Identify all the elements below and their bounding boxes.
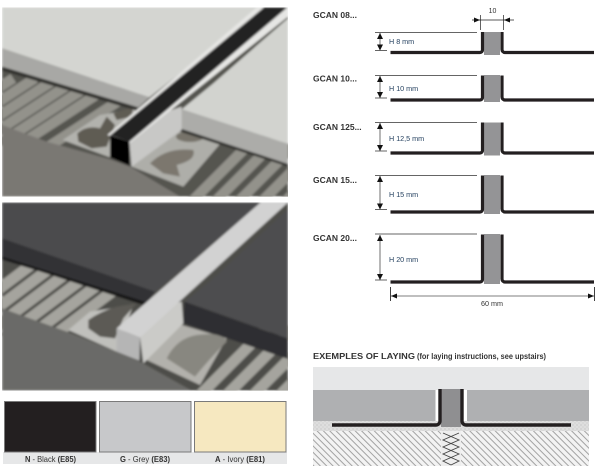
height dimension: H 15 mm (375, 176, 477, 210)
height dimension: H 12,5 mm: H 12,5 mm (389, 134, 424, 143)
label: grey: G - Grey (E83) (120, 455, 170, 464)
top surface (313, 367, 589, 390)
section: profile (390, 234, 594, 284)
joint gap and spring (441, 431, 461, 466)
laying cross-section diagram (313, 367, 589, 466)
swatch: ivory (194, 402, 286, 452)
photo: black profile between light tiles (2, 7, 288, 197)
heading: examples of laying (313, 351, 546, 361)
section: profile (390, 32, 594, 55)
width dimension: 10 (472, 8, 514, 30)
right tile (467, 390, 589, 421)
width dimension: 60 mm (390, 287, 594, 308)
heading: examples of laying: EXEMPLES OF LAYING (313, 351, 415, 361)
height dimension: H 10 mm: H 10 mm (389, 84, 418, 93)
profile: GCAN 20 (313, 233, 594, 284)
label: ivory: A - Ivory (E81) (215, 455, 265, 464)
height dimension: H 15 mm: H 15 mm (389, 190, 418, 199)
swatch: black (4, 402, 96, 452)
width dimension: 60 mm: 60 mm (481, 299, 503, 308)
band behind swatch labels (3, 452, 287, 464)
section: profile (390, 75, 594, 102)
height dimension: H 10 mm (375, 76, 477, 98)
heading: GCAN 125: GCAN 125... (313, 122, 362, 132)
profile section (332, 389, 571, 425)
heading: examples of laying: (for laying instructions, see upstairs) (417, 352, 546, 361)
height dimension: H 20 mm: H 20 mm (389, 255, 418, 264)
left tile (313, 390, 436, 421)
height dimension: H 12,5 mm (375, 122, 477, 151)
adhesive layer (313, 421, 589, 431)
profile: GCAN 15 (313, 175, 594, 214)
colour swatches (3, 402, 287, 464)
label: black: N - Black (E85) (25, 455, 76, 464)
profile: GCAN 125 (313, 122, 594, 156)
heading: GCAN 20: GCAN 20... (313, 233, 357, 243)
profile: GCAN 08 (313, 8, 594, 55)
joint filler (441, 389, 461, 427)
heading: GCAN 15: GCAN 15... (313, 175, 357, 185)
section: profile (390, 175, 594, 214)
height dimension: H 8 mm: H 8 mm (389, 37, 414, 46)
heading: GCAN 08: GCAN 08... (313, 10, 357, 20)
photo: grey profile between dark tiles (2, 202, 288, 391)
height dimension: H 8 mm (375, 32, 477, 50)
swatch: grey (100, 402, 191, 452)
left substrate (313, 431, 441, 466)
right substrate (461, 431, 589, 466)
profile: GCAN 10 (313, 74, 594, 102)
section: profile (390, 122, 594, 156)
heading: GCAN 10: GCAN 10... (313, 74, 357, 84)
height dimension: H 20 mm (375, 234, 477, 280)
width dimension: 10: 10 (489, 8, 496, 15)
